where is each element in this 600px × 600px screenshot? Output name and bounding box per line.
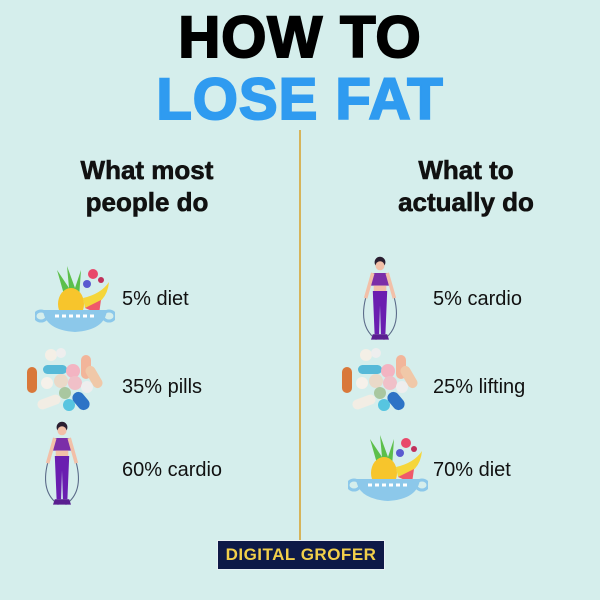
title: how to: HOW TO [178, 5, 422, 70]
logo: digital grofer [217, 540, 385, 570]
heading: what most people do [80, 155, 214, 217]
text: 5% cardio: 5% cardio [433, 288, 522, 310]
panel: right list [342, 256, 525, 501]
icon: fruit bowl [348, 435, 428, 501]
heading: what most people do: people do [86, 187, 208, 217]
icon: jump rope woman [363, 256, 397, 340]
text: 60% cardio: 60% cardio [122, 459, 222, 481]
icon: jump rope woman [45, 422, 79, 505]
text: 35% pills: 35% pills [122, 376, 202, 398]
divider line [299, 130, 301, 540]
icon: pills [342, 348, 418, 411]
heading: what most people do: What most [81, 155, 213, 185]
panel: left list [27, 266, 222, 505]
title: lose fat: LOSE FAT [156, 67, 444, 132]
text: 25% lifting: 25% lifting [433, 376, 525, 398]
text: 5% diet: 5% diet [122, 288, 189, 310]
logo: digital grofer: DIGITAL GROFER [226, 545, 376, 564]
icon: pills [27, 348, 102, 411]
heading: what to actually do: What to [418, 155, 514, 185]
heading: what to actually do: actually do [398, 187, 534, 217]
icon: fruit bowl [35, 266, 115, 332]
text: 70% diet: 70% diet [433, 459, 511, 481]
heading: what to actually do [398, 155, 534, 217]
